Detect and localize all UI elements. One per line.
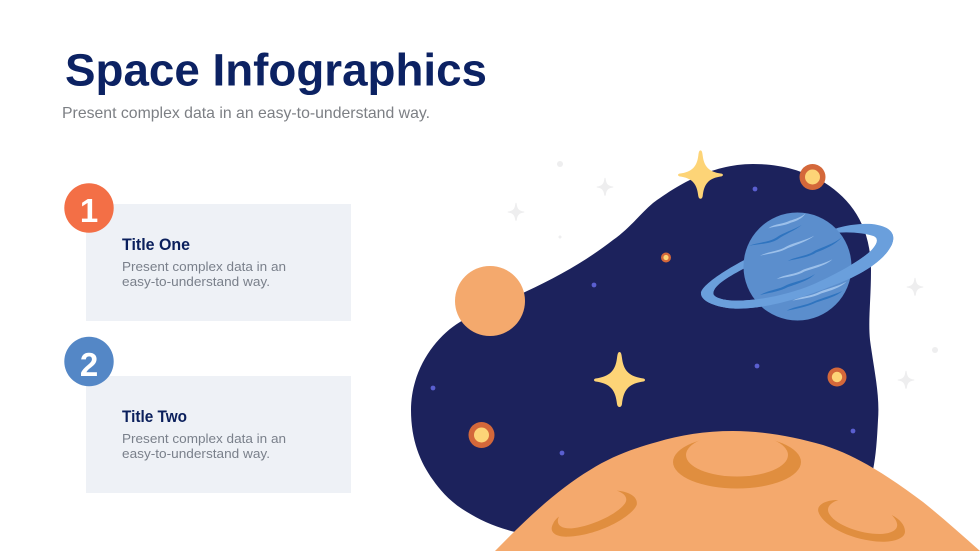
planet stripes (748, 213, 847, 311)
blue dot stars (431, 187, 855, 455)
panel: title one (64, 183, 351, 321)
orange planet (455, 266, 525, 336)
faint background stars (508, 161, 938, 389)
number badge 1: 1 (80, 192, 98, 229)
card body: easy-to-understand way. (122, 275, 270, 289)
planet body (744, 212, 852, 320)
number badge 1 (64, 183, 114, 233)
card body: Present complex data in an (122, 432, 286, 446)
ringed blue planet (701, 212, 893, 320)
ringed orange stars (468, 164, 846, 448)
planet ring back (701, 224, 893, 309)
subtitle: Present complex data in an easy-to-understand way. (62, 105, 430, 122)
moon surface (495, 431, 980, 551)
number badge 2: 2 (80, 346, 98, 383)
card body: Present complex data in an (122, 260, 286, 274)
planet ring front (701, 234, 894, 309)
moon craters (552, 434, 905, 542)
number badge 2 (64, 337, 114, 386)
illustration: space scene (411, 150, 980, 551)
card body: easy-to-understand way. (122, 447, 270, 461)
panel: title two (64, 337, 351, 493)
card background (86, 204, 351, 321)
card heading: Title Two (122, 408, 187, 426)
title: Space Infographics (65, 44, 487, 96)
navy space blob (411, 164, 878, 545)
yellow star top (678, 150, 723, 199)
card background (86, 376, 351, 493)
card heading: Title One (122, 236, 190, 254)
yellow star centre (594, 352, 645, 407)
